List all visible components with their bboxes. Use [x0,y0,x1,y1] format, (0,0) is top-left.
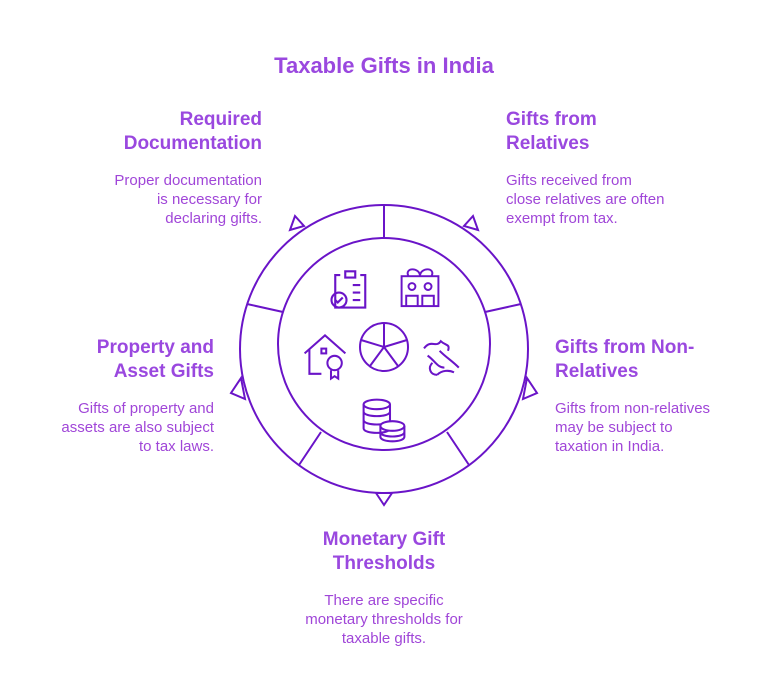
text [555,400,710,455]
text: Gifts of property and [78,400,214,417]
block: gifts from non-relatives [555,337,710,455]
block: required documentation [114,109,262,227]
icon: house with badge [305,335,345,379]
text: Gifts received from [506,172,632,189]
text: Proper documentation [114,172,262,189]
text: declaring gifts. [165,210,262,227]
text [114,172,262,227]
icon: pie center [360,323,408,371]
heading: Gifts from Non- [555,337,694,358]
text: assets are also subject [61,419,214,436]
text: is necessary for [157,191,262,208]
text: monetary thresholds for [305,611,463,628]
text: may be subject to [555,419,673,436]
heading: Documentation [124,133,262,154]
heading: Property and [97,337,214,358]
heading [555,337,694,382]
heading: Relatives [506,133,589,154]
arrows [231,216,537,505]
heading [323,529,445,574]
icon: coins [364,400,404,441]
icon: handshake [424,341,459,375]
block: gifts from relatives [506,109,664,227]
text [305,592,463,647]
heading [506,109,597,154]
block: property and asset gifts [61,337,214,455]
outer ring [231,205,537,505]
heading [124,109,262,154]
title: Taxable Gifts in India [274,53,494,78]
heading [97,337,214,382]
icon: clipboard [332,271,365,308]
text: to tax laws. [139,438,214,455]
block: monetary gift thresholds [305,529,463,647]
heading: Monetary Gift [323,529,445,550]
text [506,172,664,227]
text: exempt from tax. [506,210,618,227]
heading: Asset Gifts [114,361,214,382]
heading: Gifts from [506,109,597,130]
heading: Required [180,109,262,130]
text: taxable gifts. [342,630,426,647]
text: close relatives are often [506,191,664,208]
text [61,400,214,455]
text: taxation in India. [555,438,664,455]
text: Gifts from non-relatives [555,400,710,417]
text: There are specific [324,592,444,609]
heading: Thresholds [333,553,435,574]
icon: gift with people [402,269,438,306]
heading: Relatives [555,361,638,382]
